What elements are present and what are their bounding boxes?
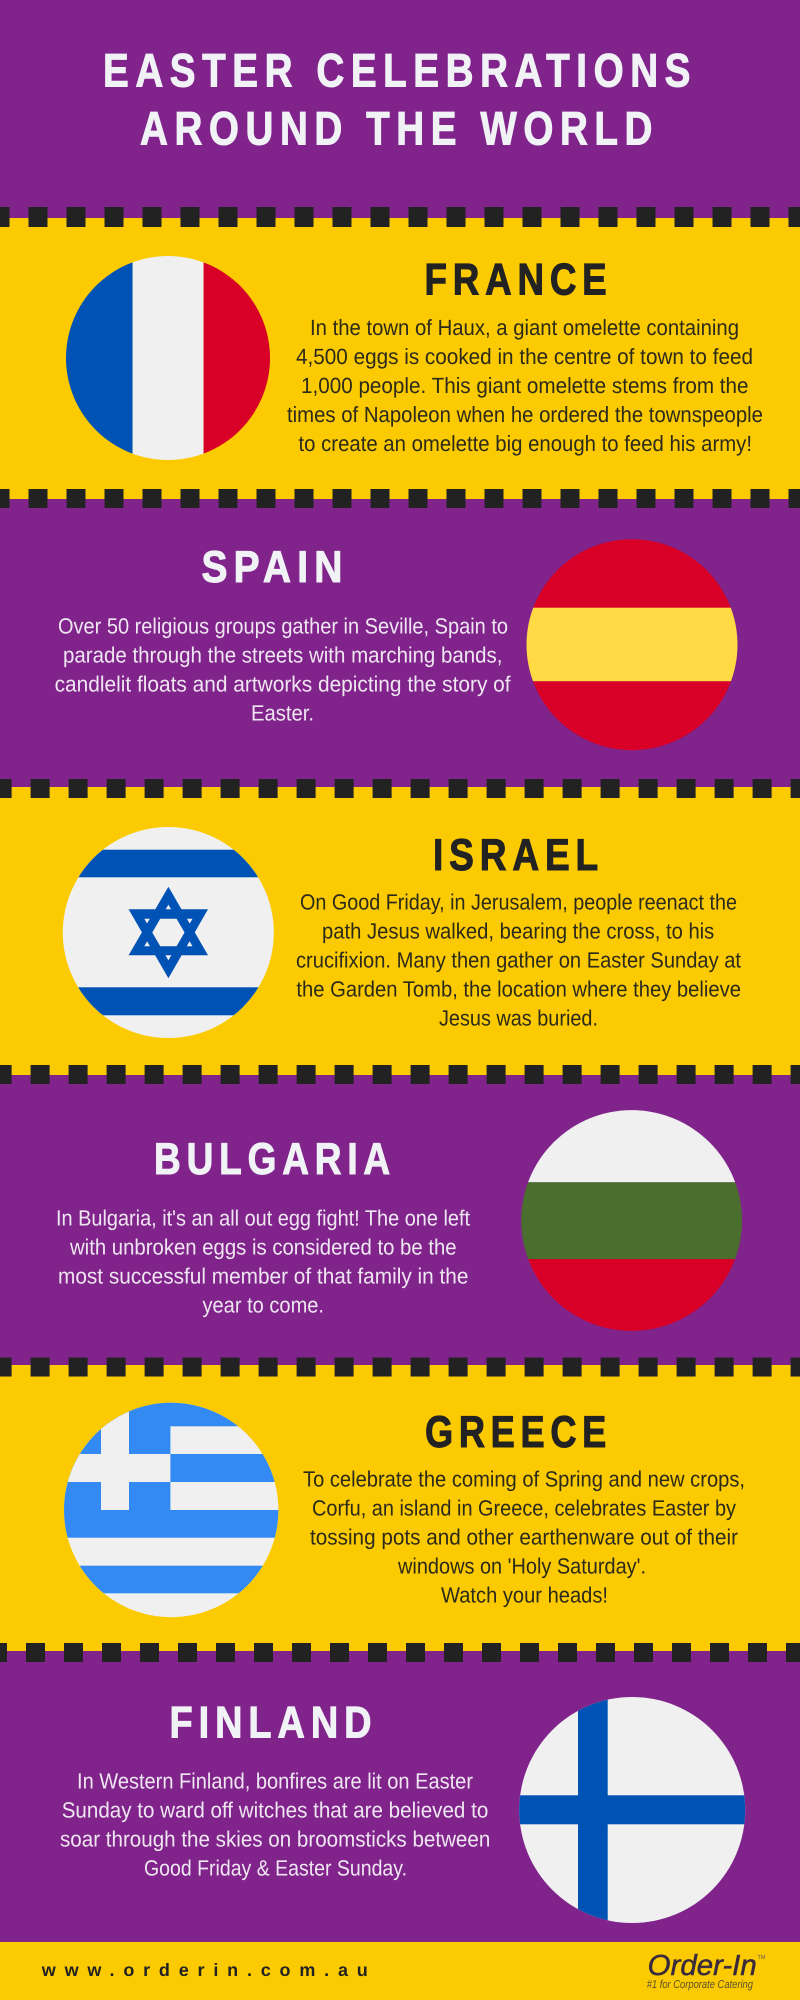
panel: Spain [55,535,745,754]
panel: Israel [0,787,800,1075]
text block: France: 4,500 eggs is cooked in the centre of town to feed [296,344,753,369]
text block: Spain: parade through the streets with marching bands, [63,642,502,668]
text block: France [287,315,763,456]
text block: Israel [296,890,741,1030]
text block: Israel: Jesus was buried. [439,1006,598,1030]
text block: Finland: soar through the skies on broomsticks between [60,1826,490,1852]
text block: France: to create an omelette big enough to feed his army! [298,431,752,456]
title: AROUND THE WORLD [140,102,659,154]
text block: Greece [303,1466,745,1608]
logo: Order-In: Order-In [648,1950,757,1982]
text block: Israel: crucifixion. Many then gather on Easter Sunday at [296,948,741,972]
text block: Greece: windows on 'Holy Saturday'. [397,1554,646,1578]
website address: www.orderin.com.au [41,1960,377,1980]
icon: Spanish flag [520,535,745,754]
text block: Bulgaria [56,1206,470,1318]
text block: Greece: Corfu, an island in Greece, celebrates Easter by [312,1496,736,1520]
panel: France [0,218,800,499]
heading: Greece: GREECE [425,1408,612,1457]
text block: Israel: the Garden Tomb, the location where they believe [296,976,741,1002]
text block: Spain [55,614,511,726]
text block: Bulgaria: year to come. [202,1292,324,1318]
heading: France: FRANCE [424,256,612,304]
logo: Order-In: #1 for Corporate Catering [647,1979,753,1991]
text block: Finland [60,1768,490,1880]
text block: France: times of Napoleon when he ordered the townspeople [287,402,763,427]
heading: Bulgaria: BULGARIA [154,1135,396,1184]
icon: Greek flag [60,1400,285,1622]
text block: Bulgaria: In Bulgaria, it's an all out egg fight! The one left [56,1206,470,1230]
heading: Spain: SPAIN [202,543,348,592]
panel: Finland [60,1690,750,1930]
text block: France: In the town of Haux, a giant omelette containing [310,315,739,340]
text block: Finland: Sunday to ward off witches that are believed to [62,1798,488,1822]
text block: Israel: On Good Friday, in Jerusalem, people reenact the [300,890,737,914]
text block: Spain: Over 50 religious groups gather in Seville, Spain to [58,614,508,638]
icon: Finnish flag [515,1690,750,1930]
footer [0,1942,800,2000]
text block: Bulgaria: with unbroken eggs is considered to be the [69,1234,457,1260]
title [103,44,697,154]
text block: Israel: path Jesus walked, bearing the cross, to his [322,918,714,944]
icon: Bulgarian flag [521,1110,742,1331]
text block: Finland: Good Friday & Easter Sunday. [144,1856,407,1880]
panel: Greece [0,1365,800,1651]
text block: Bulgaria: most successful member of that family in the [58,1264,468,1288]
panel: Bulgaria [56,1105,750,1336]
text block: Spain: Easter. [251,700,314,726]
text block: Spain: candlelit floats and artworks depicting the story of [55,672,511,696]
icon: French flag [66,256,270,460]
logo: Order-In: TM [758,1954,766,1961]
text block: Finland: In Western Finland, bonfires are lit on Easter [77,1768,473,1794]
text block: France: 1,000 people. This giant omelette stems from the [301,373,748,398]
text block: Greece: Watch your heads! [441,1582,608,1608]
icon: Israeli flag [60,820,280,1045]
heading: Finland: FINLAND [170,1698,378,1748]
text block: Greece: tossing pots and other earthenware out of their [310,1524,738,1550]
heading: Israel: ISRAEL [433,831,604,880]
text block: Greece: To celebrate the coming of Spring and new crops, [303,1466,745,1492]
